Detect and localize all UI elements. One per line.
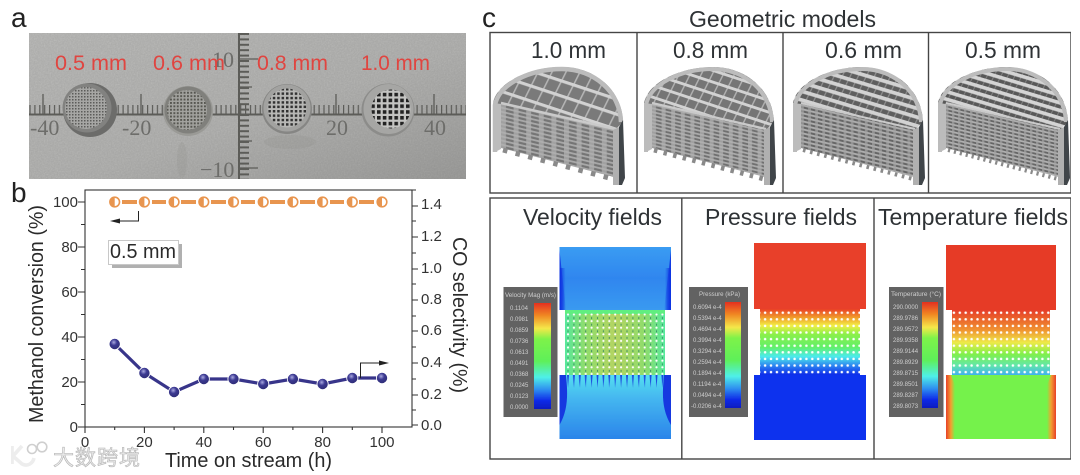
pressure heading: Pressure fields xyxy=(705,204,857,230)
velocity legend: 0.0000 xyxy=(510,405,529,411)
bottom axis tick labels: 40 xyxy=(195,434,212,451)
velocity legend: 0.0491 xyxy=(510,361,529,367)
bottom axis tick labels: 0 xyxy=(81,434,89,451)
right axis tick labels: 1.4 xyxy=(421,196,442,213)
disc 0.6 mm xyxy=(163,86,213,136)
panel b label: b xyxy=(11,177,27,208)
label box 0.5 mm: 0.5 mm xyxy=(110,241,176,263)
left axis title: Methanol conversion (%) xyxy=(26,205,48,423)
velocity contour map xyxy=(560,247,671,439)
temperature legend: 289.8073 xyxy=(893,404,919,410)
temperature contour map xyxy=(946,245,1056,439)
pressure contour map xyxy=(754,243,866,440)
model 0.8 mm: 0.8 mm xyxy=(673,37,748,63)
disc 0.5 mm xyxy=(62,83,117,137)
watermark xyxy=(12,442,140,470)
temperature legend: Temperature (°C) xyxy=(891,292,941,298)
velocity legend: 0.0368 xyxy=(510,372,529,378)
ruler scale: -40 xyxy=(30,115,59,140)
geometric models heading: Geometric models xyxy=(689,6,876,32)
velocity legend: 0.1104 xyxy=(510,306,529,312)
temperature legend xyxy=(889,287,944,417)
pressure legend: 0.1194 e-4 xyxy=(693,382,722,388)
photo background xyxy=(29,33,466,179)
right axis tick labels: 1.2 xyxy=(421,228,442,245)
left axis tick labels: 20 xyxy=(61,374,78,391)
velocity legend: 0.0859 xyxy=(510,328,529,334)
pressure legend: 0.2594 e-4 xyxy=(693,360,722,366)
ruler scale: 40 xyxy=(424,115,446,140)
model 1.0 mm: 1.0 mm xyxy=(531,37,606,63)
temperature legend: 289.8715 xyxy=(893,371,919,377)
watermark: 大数跨境 xyxy=(53,447,140,470)
pressure legend: 0.0494 e-4 xyxy=(693,393,722,399)
orange series: methanol conversion xyxy=(110,197,387,207)
model 0.8 mm xyxy=(644,37,776,185)
arrow: conversion uses left axis xyxy=(110,211,138,224)
pressure legend: -0.0206 e-4 xyxy=(691,404,722,410)
pressure field panel xyxy=(689,204,866,440)
ruler scale: −10 xyxy=(200,157,234,182)
right axis tick labels: 0.0 xyxy=(421,417,442,434)
model 0.6 mm: 0.6 mm xyxy=(825,37,902,63)
right axis tick labels: 0.8 xyxy=(421,291,442,308)
right axis tick labels: 1.0 xyxy=(421,260,442,277)
velocity field panel xyxy=(504,204,671,439)
red size labels: 0.6 mm xyxy=(153,51,225,75)
model 0.5 mm xyxy=(938,37,1070,185)
panel c: geometric models xyxy=(490,6,1071,193)
temperature legend: 289.9786 xyxy=(893,316,919,322)
bottom axis tick labels: 80 xyxy=(314,434,331,451)
pressure legend: Pressure (kPa) xyxy=(699,292,740,298)
pressure legend: 0.3994 e-4 xyxy=(693,338,722,344)
temperature legend: 290.0000 xyxy=(893,305,919,311)
right axis tick labels: 0.2 xyxy=(421,386,442,403)
arrow: selectivity uses right axis xyxy=(360,360,389,378)
velocity heading: Velocity fields xyxy=(523,204,662,230)
model 0.6 mm xyxy=(793,37,925,185)
left axis tick labels: 40 xyxy=(61,329,78,346)
velocity legend: 0.0123 xyxy=(510,394,529,400)
left axis tick labels xyxy=(53,194,78,436)
temperature legend: 289.9572 xyxy=(893,327,919,333)
temperature heading: Temperature fields xyxy=(878,204,1068,230)
bottom axis tick labels: 60 xyxy=(255,434,272,451)
temperature legend: 289.9358 xyxy=(893,338,919,344)
right axis tick labels xyxy=(421,196,442,434)
red size labels xyxy=(55,51,430,75)
right axis tick labels: 0.4 xyxy=(421,354,442,371)
left axis tick labels: 60 xyxy=(61,284,78,301)
model 1.0 mm xyxy=(493,37,625,185)
pressure legend: 0.6094 e-4 xyxy=(693,305,722,311)
velocity legend: 0.0981 xyxy=(510,317,529,323)
disc 1.0 mm xyxy=(362,84,414,136)
velocity legend xyxy=(504,287,558,417)
right axis title: CO selectivity (%) xyxy=(448,237,470,393)
red size labels: 0.8 mm xyxy=(257,51,328,75)
ruler scale: 10 xyxy=(212,47,234,72)
ruler scale: 20 xyxy=(326,115,348,140)
bottom axis tick labels xyxy=(81,434,395,451)
pressure legend: 0.1894 e-4 xyxy=(693,371,722,377)
panel c label: c xyxy=(482,2,496,33)
pressure legend xyxy=(689,287,748,417)
velocity legend: 0.0736 xyxy=(510,339,529,345)
blue series: CO selectivity xyxy=(109,338,388,398)
velocity legend: 0.0245 xyxy=(510,383,529,389)
panel a label: a xyxy=(11,2,27,33)
temperature field panel xyxy=(878,204,1068,439)
disc 0.8 mm xyxy=(262,84,312,134)
models frame xyxy=(490,32,1071,193)
left axis tick labels: 80 xyxy=(61,239,78,256)
pressure legend: 0.4694 e-4 xyxy=(693,327,722,333)
fields frame xyxy=(490,198,1071,459)
left axis tick labels: 0 xyxy=(70,419,78,436)
panel b: stability line chart xyxy=(26,190,470,472)
left axis tick labels: 100 xyxy=(53,194,78,211)
chart axes and ticks xyxy=(78,190,418,433)
ruler scale xyxy=(29,33,466,182)
red size labels: 1.0 mm xyxy=(361,51,430,75)
panel a: photo of printed catalyst supports on ruler xyxy=(29,33,466,182)
temperature legend: 289.9144 xyxy=(893,349,919,355)
temperature legend: 289.8501 xyxy=(893,382,919,388)
pressure legend: 0.3294 e-4 xyxy=(693,349,722,355)
panel c: simulation fields xyxy=(490,198,1071,459)
velocity legend: Velocity Mag (m/s) xyxy=(505,293,556,299)
velocity legend: 0.0613 xyxy=(510,350,529,356)
ruler scale: -20 xyxy=(122,115,151,140)
bottom axis tick labels: 20 xyxy=(136,434,153,451)
bottom axis tick labels: 100 xyxy=(369,434,395,451)
red size labels: 0.5 mm xyxy=(55,51,127,75)
model 0.5 mm: 0.5 mm xyxy=(965,37,1041,63)
right axis tick labels: 0.6 xyxy=(421,322,442,339)
pressure legend: 0.5394 e-4 xyxy=(693,316,722,322)
x axis title: Time on stream (h) xyxy=(165,450,332,472)
temperature legend: 289.8287 xyxy=(893,393,919,399)
temperature legend: 289.8929 xyxy=(893,360,919,366)
